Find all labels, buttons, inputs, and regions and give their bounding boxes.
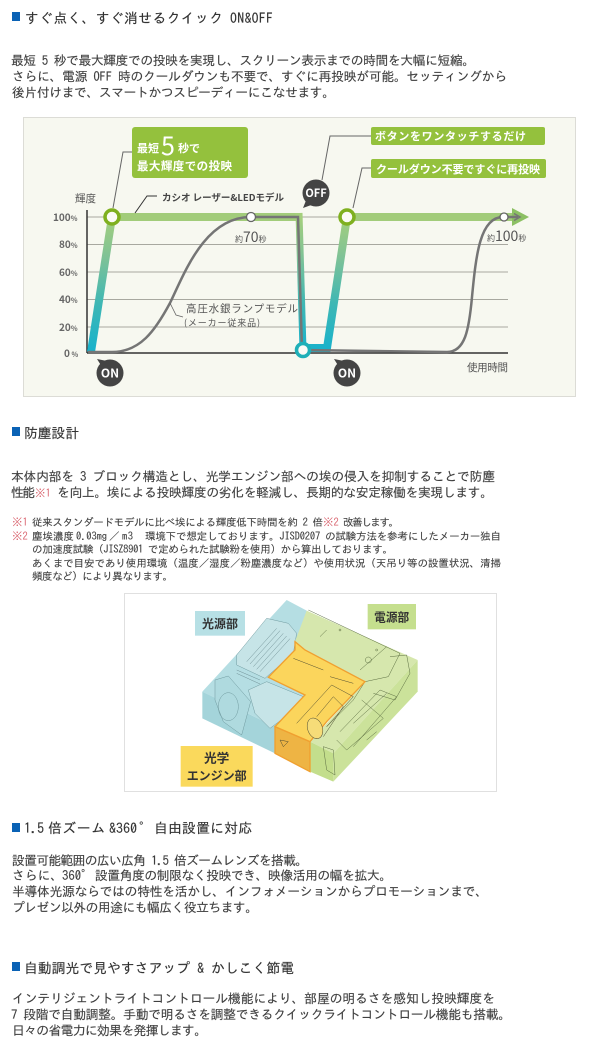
text block: footnotes: ※2 xyxy=(323,517,339,528)
text block: dust-proof description: 本体内部を 3 ブロック構造とし、光学エンジン部への埃の侵入を抑制することで防塵 xyxy=(11,469,495,483)
text block: footnotes: 0.03mg xyxy=(76,532,107,542)
heading: auto dimming: 自動調光で見やすさアップ & かしこく節電 xyxy=(24,961,294,975)
label: about 70 seconds: 約70秒 xyxy=(235,227,267,247)
text block: footnotes: 従来スタンダードモデルに比べ埃による輝度低下時間を約 2 倍 xyxy=(32,516,324,528)
panel: internal structure diagram xyxy=(124,594,496,792)
text block: zoom description xyxy=(12,853,488,914)
axis labels: brightness percent: 60% xyxy=(59,264,78,279)
label: optical engine section: 光学 xyxy=(204,748,229,767)
text block: zoom description: 設置可能範囲の広い広角 1.5 倍ズームレンズを搭載。 xyxy=(12,853,308,867)
callout: no cool down: クールダウン不要ですぐに再投映 xyxy=(376,161,540,177)
icon: ON bubble right xyxy=(334,359,360,386)
axis labels: brightness percent: 0 % xyxy=(64,345,78,360)
text block: quick on/off description: 後片付けまで、スマートかつスピーディーにこなせます。 xyxy=(12,86,335,99)
diagram: optical engine block xyxy=(268,642,365,772)
text block: zoom description: さらに、 xyxy=(12,869,63,882)
text block: footnotes: の加速度試験（JISZ8901 で定められた試験粉を使用）から算出しております。 xyxy=(32,543,393,555)
heading: zoom and installation: 1.5 xyxy=(24,821,44,835)
heading: quick on/off: すぐ点く、すぐ消せるクイック xyxy=(25,11,223,25)
text block: footnotes: 塵埃濃度 xyxy=(32,531,74,542)
label: optical engine section xyxy=(181,746,253,787)
axis labels: brightness percent: 100% xyxy=(53,209,78,224)
text block: auto dimming description xyxy=(11,991,511,1037)
section: dust-proof design xyxy=(11,426,501,582)
axis labels: brightness percent: 40% xyxy=(59,291,78,306)
label: laser and LED model: カシオ レーザー&LEDモデル xyxy=(162,190,284,204)
callout: one touch button: ボタンをワンタッチするだけ xyxy=(375,128,526,144)
diagram: light source block xyxy=(202,600,307,753)
text block: zoom description: プレゼン以外の用途にも幅広く役立ちます。 xyxy=(12,901,258,914)
text block: dust-proof description: 性能 xyxy=(11,485,35,499)
text block: quick on/off description xyxy=(11,53,507,99)
text block: footnotes: あくまで目安であり使用環境（温度／湿度／粉塵濃度など）や使用状況（天吊り等の設置状況、清掃 xyxy=(32,557,501,569)
label: mercury lamp model: 高圧水銀ランプモデル xyxy=(186,301,298,316)
axis labels: brightness percent xyxy=(53,191,508,375)
text block: footnotes: 改善します。 xyxy=(343,517,399,528)
icon: OFF bubble xyxy=(302,180,330,208)
axis labels: brightness percent: 20% xyxy=(59,319,78,334)
label: light source section xyxy=(195,611,245,636)
heading: zoom and installation xyxy=(12,820,252,835)
callout: 5 second start: 5 xyxy=(161,127,175,163)
text block: dust-proof description xyxy=(11,469,495,499)
icon: ON bubble left: ON xyxy=(101,364,119,382)
callout: 5 second start xyxy=(113,127,248,208)
text block: footnotes: 環境下で想定しております。JISD0207 の試験方法を参考にしたメーカー独自 xyxy=(145,531,501,542)
label: power supply section: 電源部 xyxy=(374,608,409,625)
label: mercury lamp model: (メーカー従来品) xyxy=(184,316,260,329)
text block: footnotes: 頻度など）により異なります。 xyxy=(32,571,173,582)
label: laser and LED model xyxy=(135,190,284,213)
text block: quick on/off description: 最短 5 秒で最大輝度での投映を実現し、スクリーン表示までの時間を大幅に短縮。 xyxy=(11,53,475,67)
text block: zoom description: ° xyxy=(81,869,94,882)
text block: footnotes: ／ xyxy=(109,531,120,542)
text block: footnotes xyxy=(12,516,501,582)
section: auto dimming xyxy=(11,961,511,1037)
series: laser and LED model line xyxy=(91,208,529,352)
callout: one touch button xyxy=(322,127,545,180)
text block: quick on/off description: さらに、電源 OFF 時のクールダウンも不要で、すぐに再投映が可能。セッティングから xyxy=(12,69,507,83)
label: mercury lamp model xyxy=(170,301,298,329)
text block: auto dimming description: 日々の省電力に効果を発揮します。 xyxy=(12,1024,207,1037)
text block: auto dimming description: インテリジェントライトコントロール機能により、部屋の明るさを感知し投映輝度を xyxy=(12,991,495,1005)
callout: 5 second start: 最短 xyxy=(137,140,159,156)
heading: quick on/off: ON&OFF xyxy=(230,11,273,25)
axis labels: brightness percent: 80% xyxy=(59,236,78,251)
label: power supply section xyxy=(368,604,416,629)
text block: zoom description: 設置角度の制限なく投映でき、映像活用の幅を拡大。 xyxy=(95,869,392,882)
series: mercury lamp model curve xyxy=(88,214,520,352)
heading: zoom and installation: 倍ズーム xyxy=(48,821,105,835)
icon: ON bubble left xyxy=(96,359,124,386)
panel: brightness chart xyxy=(24,118,576,396)
heading: dust-proof design: 防塵設計 xyxy=(24,426,79,440)
heading: zoom and installation: ° xyxy=(139,820,153,835)
section: 1.5x zoom and 360 degree installation xyxy=(12,820,488,914)
text block: footnotes: m3 xyxy=(122,532,133,542)
markers: chart points xyxy=(105,210,508,356)
callout: no cool down xyxy=(353,159,546,208)
heading: zoom and installation: 自由設置に対応 xyxy=(154,821,252,835)
text block: dust-proof description: を向上。埃による投映輝度の劣化を軽減し、長期的な安定稼働を実現します。 xyxy=(57,485,493,499)
text block: footnotes: ※1 xyxy=(12,517,28,528)
heading: zoom and installation: &360 xyxy=(109,821,137,835)
text block: zoom description: 半導体光源ならではの特性を活かし、インフォメーションからプロモーションまで、 xyxy=(12,884,488,898)
diagram: power supply block xyxy=(295,610,418,782)
text block: auto dimming description: 7 段階で自動調整。手動で明るさを調整できるクイックライトコントロール機能も搭載。 xyxy=(11,1007,511,1021)
text block: dust-proof description: ※1 xyxy=(35,488,51,499)
label: about 100 seconds: 約100秒 xyxy=(487,226,526,246)
section: quick on/off xyxy=(11,11,507,99)
axis labels: brightness percent: 輝度 xyxy=(75,191,96,206)
callout: 5 second start: 秒で xyxy=(178,140,200,156)
label: optical engine section: エンジン部 xyxy=(187,767,247,784)
axis labels: brightness percent: 使用時間 xyxy=(467,360,508,375)
label: light source section: 光源部 xyxy=(202,615,238,632)
icon: ON bubble right: ON xyxy=(338,364,356,382)
text block: footnotes: ※2 xyxy=(12,531,28,542)
callout: 5 second start: 最大輝度での投映 xyxy=(137,158,232,174)
icon: OFF bubble: OFF xyxy=(305,185,327,201)
text block: zoom description: 360 xyxy=(62,869,81,882)
